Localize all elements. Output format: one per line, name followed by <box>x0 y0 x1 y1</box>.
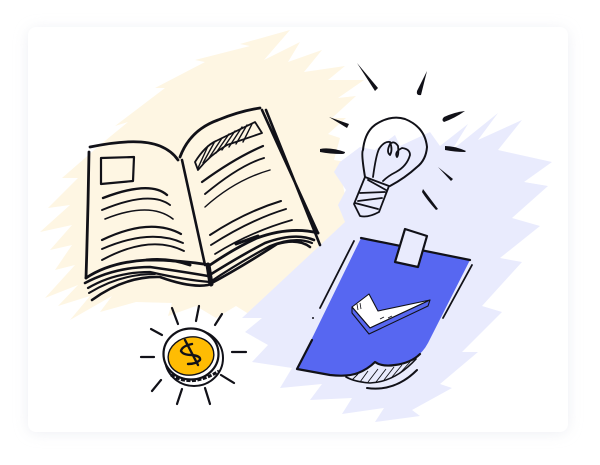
right page outline <box>180 108 260 157</box>
filament <box>373 142 410 181</box>
shadow hatching <box>346 359 417 389</box>
bulb glass <box>362 118 427 186</box>
bulb base <box>354 177 389 216</box>
panel: white card <box>28 27 568 433</box>
page stack <box>85 230 318 300</box>
sheet outline strokes <box>297 238 470 376</box>
hatched heading <box>195 122 262 170</box>
icon: open book <box>85 108 320 300</box>
right page text lines <box>202 146 292 254</box>
brush stroke: yellow <box>40 30 364 320</box>
coin face <box>164 328 218 380</box>
brush stroke: blue <box>242 113 552 422</box>
coin rays <box>141 306 246 404</box>
dollar symbol <box>181 340 200 365</box>
clipboard sheet <box>297 238 470 375</box>
motion lines <box>320 241 472 318</box>
right page edge <box>262 110 320 245</box>
bulb rays <box>320 63 466 210</box>
icon: blue clipboard with check <box>297 229 472 389</box>
left page outline <box>86 142 178 278</box>
check mark <box>352 294 430 334</box>
spine <box>182 160 205 265</box>
picture box <box>101 157 134 184</box>
icon: light bulb <box>354 118 427 216</box>
left page text lines <box>102 188 184 260</box>
coin edge <box>165 330 223 386</box>
icon: gold dollar coin <box>164 328 223 386</box>
clip <box>395 229 427 267</box>
